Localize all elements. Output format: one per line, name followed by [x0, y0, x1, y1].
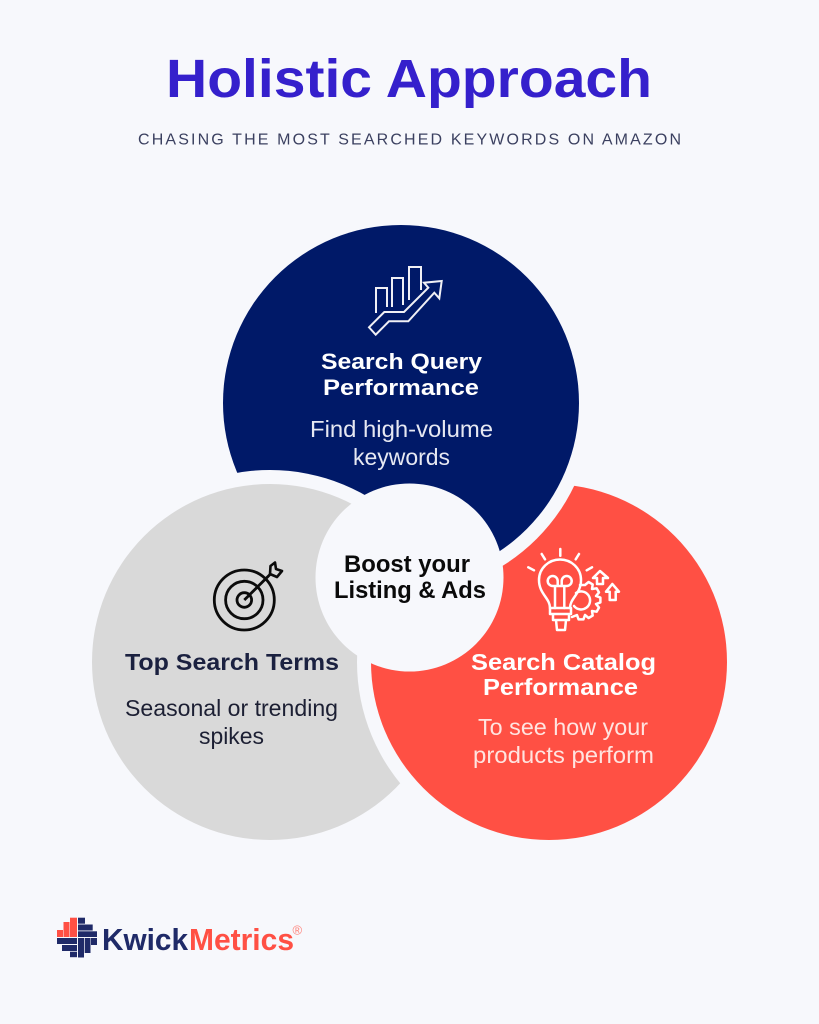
text: to see how your products perform: To see how your [478, 714, 648, 740]
heading: top search terms: Top Search Terms [125, 649, 339, 675]
registered mark: ® [292, 922, 302, 938]
panel: top search terms circle [92, 484, 400, 840]
icon: target with arrow [214, 562, 282, 630]
text: seasonal or trending spikes: spikes [199, 723, 264, 749]
text: boost your listing and ads: Listing & Ads [334, 577, 486, 604]
text: boost your listing and ads [334, 551, 486, 604]
heading: search query performance: Performance [323, 375, 479, 400]
heading: search catalog performance [471, 649, 656, 700]
heading: search catalog performance: Search Catalog [471, 649, 656, 675]
text: seasonal or trending spikes [125, 695, 338, 749]
heading: search query performance: Search Query [321, 349, 483, 374]
text: find high-volume keywords: Find high-volume [310, 416, 493, 442]
subtitle: CHASING THE MOST SEARCHED KEYWORDS ON AMAZON [138, 132, 681, 148]
logo: KwickMetrics [57, 918, 302, 958]
title: Holistic Approach [166, 49, 652, 109]
text: boost your listing and ads: Boost your [344, 551, 470, 578]
text: find high-volume keywords: keywords [353, 444, 450, 470]
panel: search query performance circle [223, 225, 579, 581]
panel: search catalog performance circle [371, 484, 727, 840]
heading: search query performance [321, 349, 483, 400]
text: to see how your products perform [473, 714, 654, 768]
text: find high-volume keywords [310, 416, 493, 470]
icon: logo mark [57, 918, 97, 958]
wordmark: Metrics [189, 922, 294, 957]
icon: light bulb with gear and arrows [528, 549, 619, 630]
text: to see how your products perform: products perform [473, 742, 654, 768]
wordmark: Kwick [102, 922, 189, 957]
panel: centre circle [316, 484, 504, 672]
heading: search catalog performance: Performance [483, 674, 638, 700]
icon: rising bar chart with arrow [369, 267, 442, 335]
text: seasonal or trending spikes: Seasonal or trending [125, 695, 338, 721]
